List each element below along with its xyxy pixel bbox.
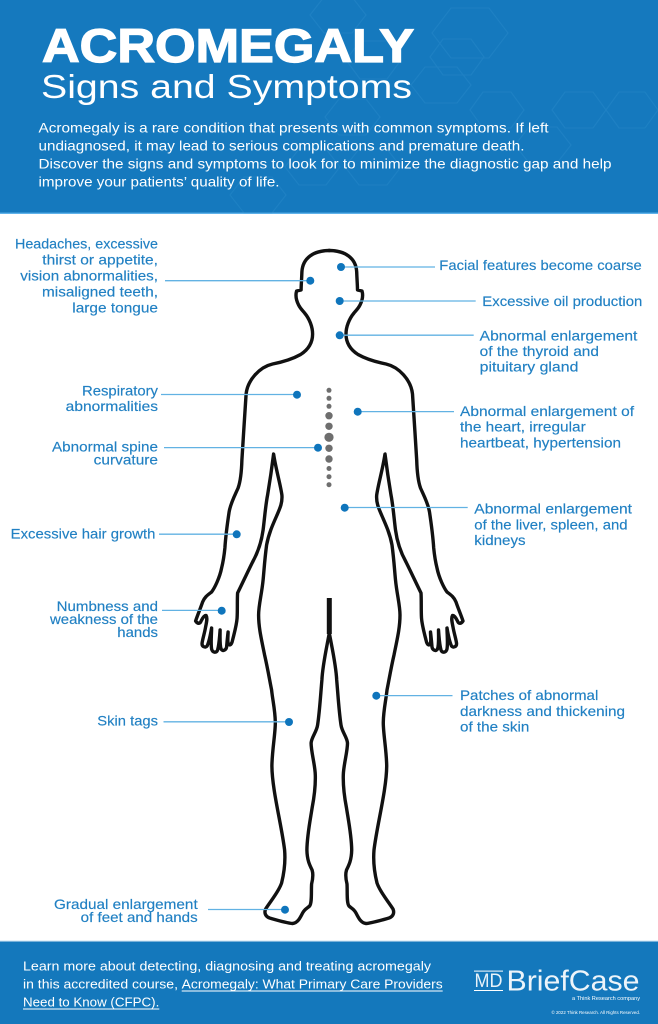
callout: skin patches: darkness and thickening — [460, 704, 625, 719]
callout: liver, spleen, kidneys — [341, 501, 632, 548]
callout: headaches: Headaches, excessive — [15, 237, 158, 252]
callout: heart — [354, 404, 634, 451]
callout: liver, spleen, kidneys: Abnormal enlargement — [474, 501, 632, 516]
footer course text — [23, 958, 443, 1010]
intro paragraph: Acromegaly is a rare condition that presents with common symptoms. If left — [38, 120, 549, 136]
callout: skin patches: of the skin — [460, 720, 529, 735]
callout: thyroid and pituitary: Abnormal enlargement — [480, 328, 638, 343]
callout: heart: the heart, irregular — [460, 420, 586, 435]
callout: headaches: thirst or appetite, — [42, 253, 158, 268]
callout: skin patches — [372, 688, 625, 735]
callout: hair growth: Excessive hair growth — [11, 527, 155, 542]
intro paragraph — [38, 120, 612, 190]
title: Signs and Symptoms — [41, 69, 412, 106]
callout: thyroid and pituitary: of the thyroid and — [480, 344, 599, 359]
callout: numbness — [49, 599, 226, 640]
callout: feet and hands: of feet and hands — [81, 910, 198, 925]
intro paragraph: improve your patients’ quality of life. — [38, 174, 280, 190]
callout: respiratory: Respiratory — [82, 384, 158, 399]
footer course text: Acromegaly: What Primary Care Providers — [182, 977, 443, 992]
callout: facial features — [337, 258, 642, 273]
callout: skin tags: Skin tags — [97, 713, 158, 728]
callout: facial features: Facial features become coarse — [439, 258, 642, 273]
footer panel — [0, 941, 658, 1024]
title: ACROMEGALY — [42, 19, 414, 72]
footer course text: in this accredited course, — [23, 977, 178, 992]
callout: respiratory — [66, 384, 301, 414]
callout: heart: Abnormal enlargement of — [460, 404, 634, 419]
callout: spine curvature — [52, 439, 322, 467]
callout: headaches: large tongue — [72, 300, 158, 315]
callout: spine curvature: Abnormal spine — [52, 439, 158, 454]
logo: MD BriefCase: a Think Research company — [572, 996, 640, 1002]
callout: headaches: vision abnormalities, — [20, 269, 158, 284]
callout: numbness: hands — [117, 625, 158, 640]
callout: headaches — [15, 237, 314, 315]
title — [41, 19, 414, 106]
callout: numbness: weakness of the — [49, 612, 158, 627]
footer course text: Learn more about detecting, diagnosing and treating acromegaly — [23, 958, 431, 973]
body outline figure — [196, 250, 463, 924]
header panel — [0, 0, 658, 214]
callout: headaches: misaligned teeth, — [42, 284, 158, 300]
logo: MD BriefCase: BriefCase — [506, 966, 640, 998]
footer course text: Need to Know (CFPC). — [23, 995, 159, 1010]
callout: hair growth — [11, 527, 241, 542]
logo: MD BriefCase: MD — [474, 971, 502, 992]
callout: heart: heartbeat, hypertension — [460, 436, 621, 451]
callout: thyroid and pituitary: pituitary gland — [480, 360, 578, 375]
callout: liver, spleen, kidneys: of the liver, spleen, and — [474, 517, 628, 532]
copyright: © 2022 Think Research. All Rights Reserved. — [552, 1010, 640, 1015]
callout: respiratory: abnormalities — [66, 399, 158, 414]
intro paragraph: Discover the signs and symptoms to look for to minimize the diagnostic gap and help — [38, 156, 612, 172]
callout: spine curvature: curvature — [94, 452, 158, 467]
spine dots — [324, 388, 334, 487]
callout: liver, spleen, kidneys: kidneys — [474, 533, 526, 548]
callout: oil production: Excessive oil production — [482, 294, 642, 309]
logo: MD BriefCase — [474, 966, 640, 1002]
callout: oil production — [336, 294, 642, 309]
callout: skin tags — [97, 713, 293, 728]
callout: thyroid and pituitary — [336, 328, 638, 375]
callout: feet and hands: Gradual enlargement — [54, 897, 198, 912]
callout: feet and hands — [54, 897, 289, 925]
callout: numbness: Numbness and — [57, 599, 158, 614]
intro paragraph: undiagnosed, it may lead to serious complications and premature death. — [38, 138, 524, 154]
callout: skin patches: Patches of abnormal — [460, 688, 598, 703]
